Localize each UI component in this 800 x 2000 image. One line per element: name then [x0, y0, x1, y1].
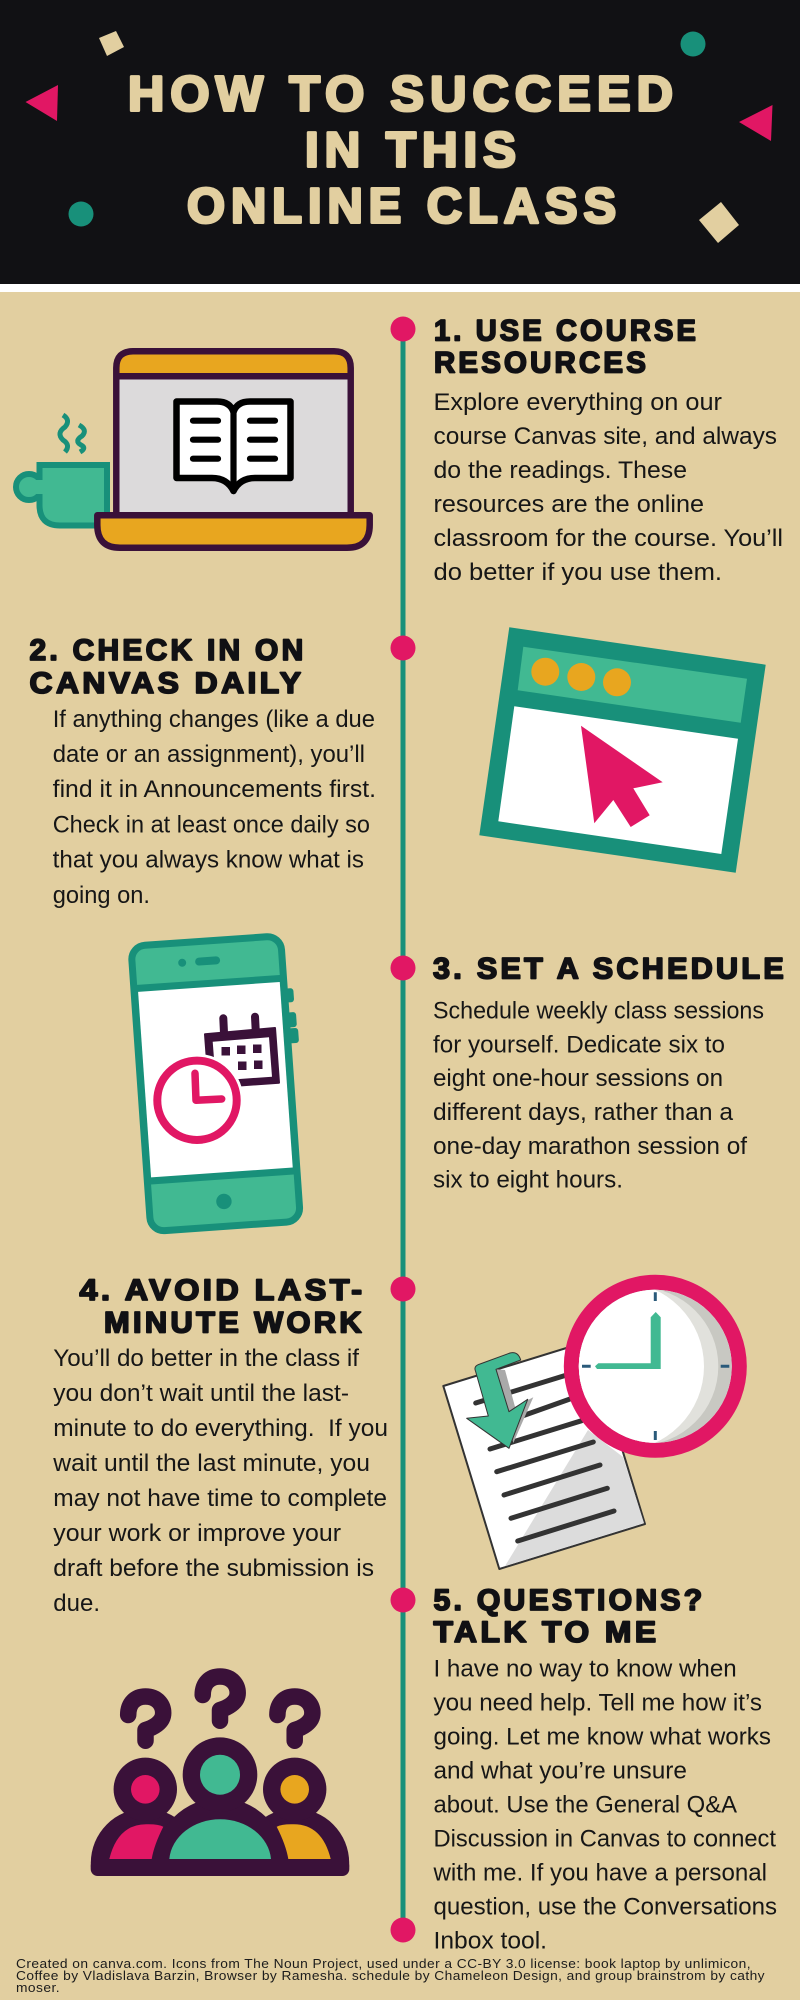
section 1 text: do better if you use them. — [434, 559, 722, 586]
section 2 text: going on. — [53, 882, 150, 909]
section 4 text: may not have time to complete — [53, 1485, 387, 1512]
section 1 heading — [434, 314, 699, 380]
title — [128, 66, 679, 234]
section 4 text: your work or improve your — [53, 1520, 341, 1547]
section 1 heading: 1. USE COURSE — [434, 314, 699, 348]
timeline — [390, 316, 416, 1942]
section 3 text: eight one-hour sessions on — [433, 1065, 723, 1092]
section 3 text: different days, rather than a — [433, 1099, 734, 1126]
section 3 text: for yourself. Dedicate six to — [433, 1031, 725, 1058]
section 5 text: and what you’re unsure — [434, 1758, 687, 1785]
section 2 text: date or an assignment), you’ll — [53, 741, 365, 768]
section 5 text: you need help. Tell me how it’s — [434, 1690, 762, 1717]
section 5 text: going. Let me know what works — [434, 1724, 771, 1751]
section 5 text: about. Use the General Q&A — [434, 1792, 737, 1819]
section 5 text: with me. If you have a personal — [432, 1860, 767, 1887]
footer credits: moser. — [16, 1980, 60, 1995]
decorative triangle left — [26, 85, 58, 121]
section 4 text — [52, 1345, 388, 1617]
section 2 heading: CANVAS DAILY — [30, 667, 304, 700]
section 1 text — [434, 389, 783, 586]
section 4 heading: MINUTE WORK — [104, 1306, 365, 1340]
decorative diamond bottom right — [699, 202, 739, 243]
section 2 heading — [30, 634, 306, 700]
section 4 text: you don’t wait until the last- — [53, 1380, 349, 1407]
section 4 heading — [80, 1274, 366, 1340]
section 2 text: find it in Announcements first. — [53, 776, 376, 803]
decorative diamond top left — [99, 31, 124, 56]
footer credits: Created on canva.com. Icons from The Noun Project, used under a CC-BY 3.0 license: book laptop by unlimicon, — [16, 1956, 751, 1971]
header banner — [0, 0, 800, 292]
section 2 text — [53, 706, 376, 909]
section 3 text: six to eight hours. — [433, 1167, 623, 1194]
section 1 text: classroom for the course. You’ll — [434, 525, 783, 552]
section 4 text: You’ll do better in the class if — [53, 1345, 359, 1372]
section 1 text: do the readings. These — [434, 457, 687, 484]
section 5 text — [432, 1656, 777, 1955]
section 1 text: resources are the online — [434, 491, 704, 518]
section 3 text — [433, 997, 764, 1194]
section 2 text: If anything changes (like a due — [53, 706, 375, 733]
section 5 heading: 5. QUESTIONS? — [434, 1584, 706, 1617]
section 4 text: minute to do everything. If you — [53, 1415, 388, 1442]
footer credits: Coffee by Vladislava Barzin, Browser by Ramesha. schedule by Chameleon Design, and group brainstrom by cathy — [16, 1968, 765, 1983]
decorative triangle right — [739, 105, 772, 141]
section 4 text: draft before the submission is — [53, 1555, 374, 1582]
icon: book laptop — [97, 351, 370, 548]
decorative circle bottom left — [68, 202, 94, 226]
title: IN THIS — [305, 122, 522, 178]
section 5 text: Inbox tool. — [434, 1928, 547, 1955]
section 5 heading: TALK TO ME — [434, 1616, 660, 1649]
section 4 text: due. — [53, 1590, 100, 1617]
title: HOW TO SUCCEED — [128, 66, 679, 122]
icon: coffee cup — [16, 415, 107, 526]
section 5 heading — [434, 1584, 706, 1649]
icon: phone with calendar and clock — [131, 935, 311, 1232]
footer credits — [16, 1956, 765, 1995]
section 4 text: wait until the last minute, you — [52, 1450, 370, 1477]
section 3 text: one-day marathon session of — [433, 1133, 747, 1160]
icon: document with arrow and clock — [443, 1282, 739, 1569]
title: ONLINE CLASS — [187, 178, 622, 234]
section 5 text: question, use the Conversations — [434, 1894, 777, 1921]
section 3 heading: 3. SET A SCHEDULE — [433, 952, 787, 986]
decorative circle top right — [680, 32, 706, 56]
icon: group with question marks — [90, 1668, 350, 1876]
section 3 text: Schedule weekly class sessions — [433, 997, 764, 1024]
section 5 text: I have no way to know when — [434, 1656, 737, 1683]
icon: browser window with cursor — [479, 627, 766, 873]
section 2 text: Check in at least once daily so — [53, 812, 370, 838]
section 2 heading: 2. CHECK IN ON — [30, 634, 306, 667]
section 4 heading: 4. AVOID LAST- — [80, 1274, 366, 1307]
section 1 text: Explore everything on our — [434, 389, 722, 416]
section 1 text: course Canvas site, and always — [434, 423, 777, 450]
section 1 heading: RESOURCES — [434, 346, 649, 380]
section 2 text: that you always know what is — [53, 846, 364, 874]
section 5 text: Discussion in Canvas to connect — [434, 1826, 776, 1853]
